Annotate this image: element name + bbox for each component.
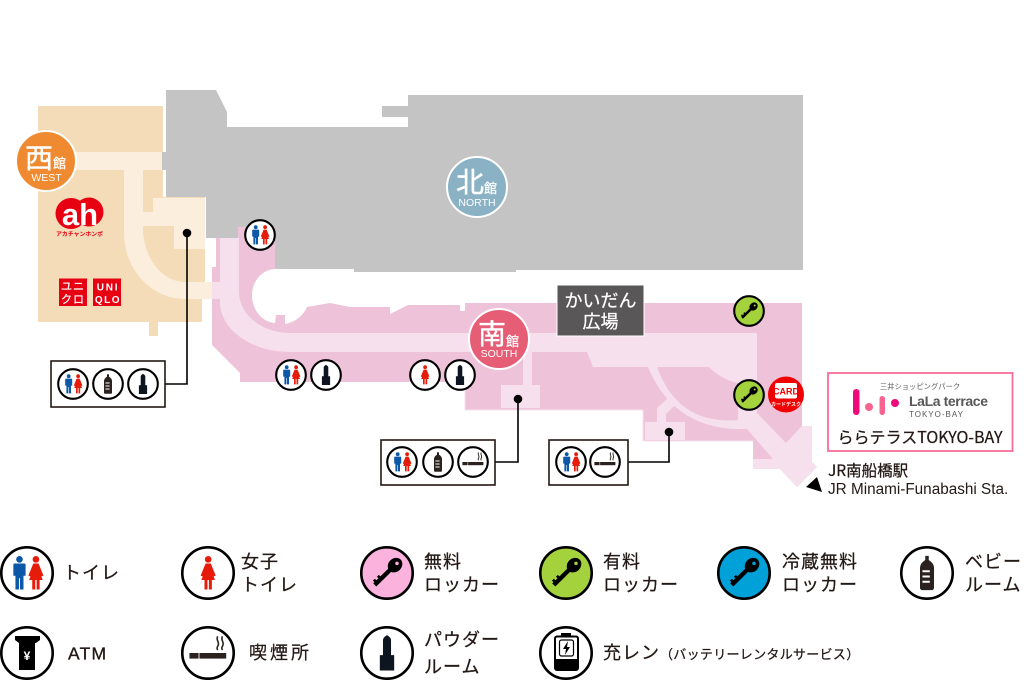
icon: card desk [768, 376, 804, 412]
badge: north building: 北 [456, 161, 484, 201]
legend: baby room [901, 547, 1022, 599]
legend: refrigerated free locker [718, 547, 858, 599]
legend: free locker [361, 547, 500, 599]
legend: smoking area: 喫煙所 [249, 639, 312, 665]
logo: Uniqlo [59, 278, 121, 307]
legend: smoking area [182, 627, 312, 679]
legend: toilet [1, 547, 120, 599]
station label: JR南船橋駅 [828, 459, 909, 481]
badge: north building: NORTH [458, 197, 496, 209]
legend: women's toilet: 女子 [241, 548, 279, 574]
badge: north building [447, 157, 507, 217]
legend: baby room: ルーム [965, 571, 1021, 597]
legend: refrigerated free locker: 冷蔵無料 [782, 548, 858, 574]
badge: south building [469, 309, 529, 369]
icon: restroom north [245, 220, 275, 250]
stairs plaza label [557, 285, 644, 336]
badge: west building [16, 131, 76, 191]
west building floor [38, 106, 212, 336]
logo panel: LaLa terrace [828, 373, 1012, 451]
badge: west building: 西 [25, 137, 53, 177]
logo panel: LaLa terrace: TOKYO-BAY [909, 410, 964, 419]
logo: Uniqlo: クロ [61, 291, 85, 307]
legend: women's toilet [182, 547, 298, 599]
icon: paid locker upper [734, 296, 764, 326]
badge: north building: 館 [484, 178, 497, 197]
legend: toilet: トイレ [63, 559, 120, 585]
legend: baby room: ベビー [965, 548, 1022, 574]
legend: ATM: ATM [68, 644, 107, 664]
icon: card desk: CARD [773, 386, 799, 396]
legend: paid locker: ロッカー [603, 571, 679, 597]
legend: powder room: パウダー [424, 626, 500, 652]
badge: south building: SOUTH [481, 348, 517, 360]
legend: ATM [1, 627, 107, 679]
station label [828, 459, 1008, 498]
legend: free locker: ロッカー [424, 571, 500, 597]
callout: south facilities [381, 395, 522, 485]
stairs plaza label: かいだん [564, 287, 636, 313]
logo: Akachan Honpo [56, 197, 104, 238]
legend: ATM: ¥ [24, 649, 31, 663]
legend: free locker: 無料 [424, 548, 462, 574]
legend: powder room: ルーム [424, 653, 480, 679]
badge: west building: WEST [31, 172, 62, 184]
icon: card desk: カードデスク [771, 401, 801, 408]
callout: west facilities [51, 229, 191, 407]
legend: paid locker: 有料 [603, 548, 641, 574]
legend: refrigerated free locker: ロッカー [782, 571, 858, 597]
legend: women's toilet: トイレ [241, 571, 298, 597]
stairs plaza label: 広場 [582, 308, 618, 334]
callout: southeast facilities [549, 428, 673, 485]
badge: west building: 館 [53, 153, 66, 172]
arrow: to JR station [806, 477, 822, 492]
south building floor [212, 227, 817, 487]
badge: south building: 南 [478, 313, 506, 353]
badge: south building: 館 [506, 331, 519, 350]
logo panel: LaLa terrace: LaLa terrace [909, 393, 988, 409]
legend: paid locker [540, 547, 679, 599]
icon: paid locker lower [734, 380, 764, 410]
icons: south corridor restroom and powder room [276, 360, 341, 390]
logo panel: LaLa terrace: 三井ショッピングパーク [880, 382, 960, 392]
icons: south corridor women's room and powder room [410, 360, 475, 390]
logo panel: LaLa terrace: ららテラスTOKYO-BAY [838, 424, 1003, 448]
legend: powder room [361, 626, 500, 679]
legend: battery rental: （バッテリーレンタルサービス） [660, 644, 860, 663]
legend: battery rental [540, 627, 860, 679]
logo: Uniqlo: ユニ [61, 278, 85, 294]
logo: Akachan Honpo: アカチャンホンポ [56, 229, 103, 238]
station label: JR Minami-Funabashi Sta. [828, 481, 1008, 498]
logo: Uniqlo: QLO [95, 295, 121, 306]
logo: Uniqlo: UNI [97, 282, 119, 294]
legend: battery rental: 充レン [603, 639, 660, 665]
north building floor [162, 90, 803, 272]
logo: Akachan Honpo: ah [62, 197, 98, 232]
